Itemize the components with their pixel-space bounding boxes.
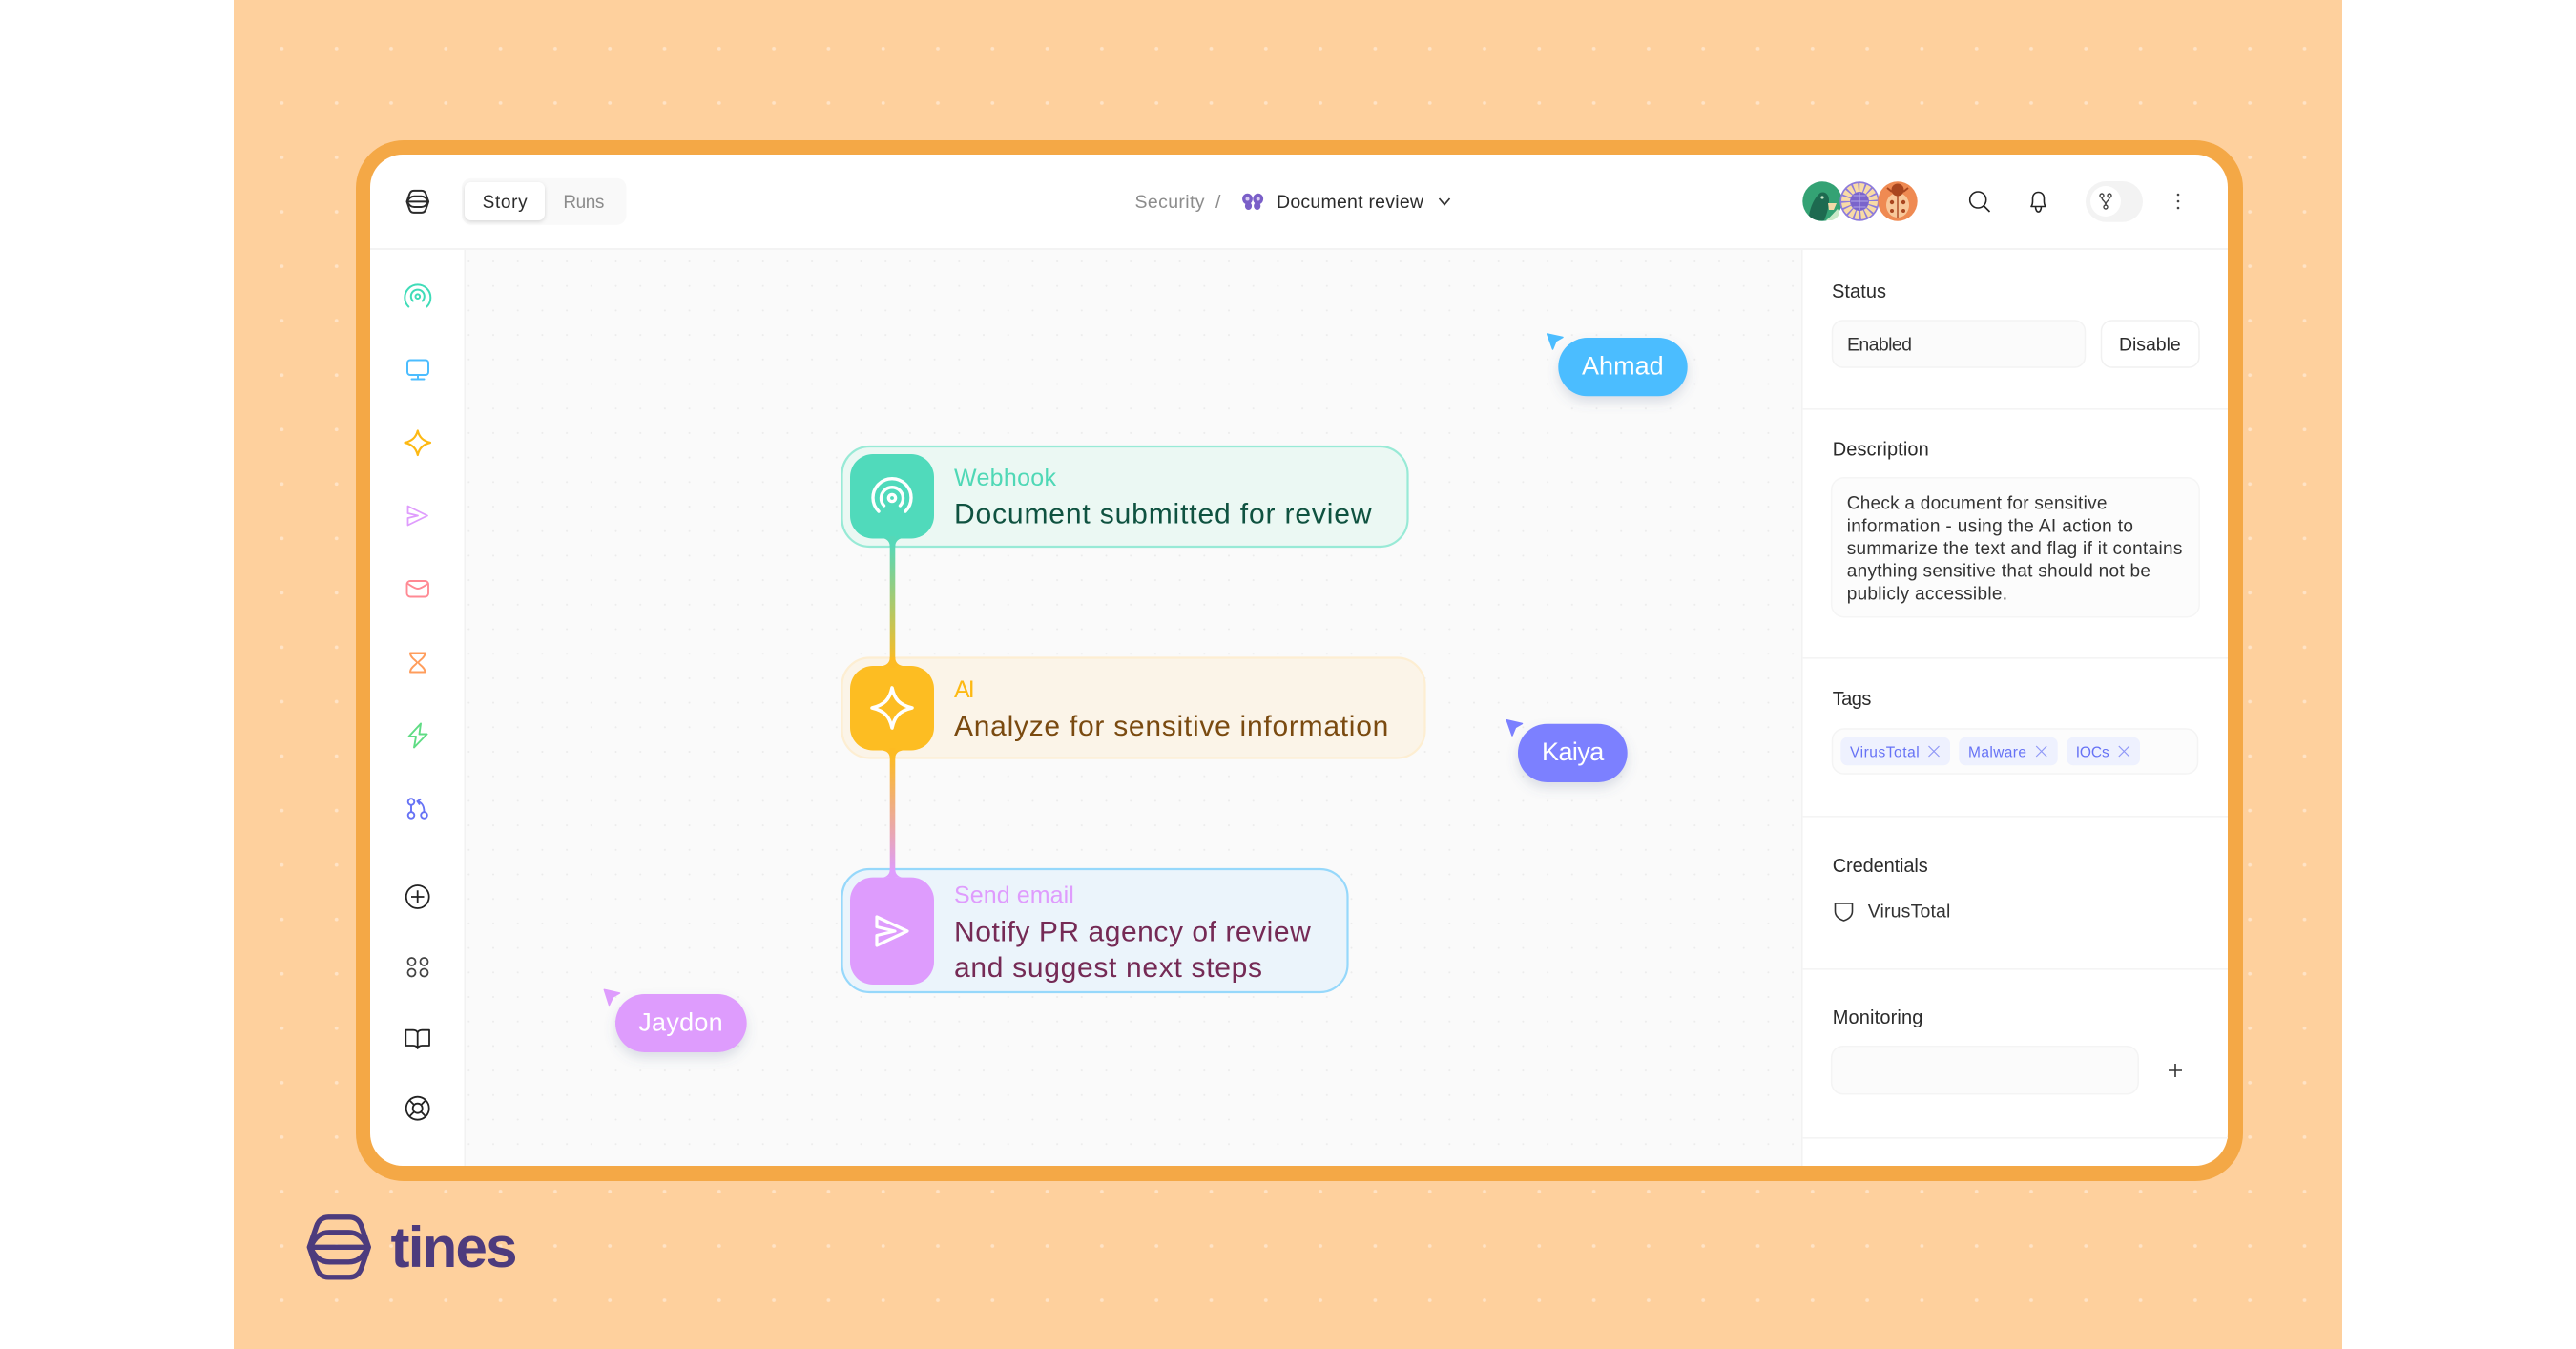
icon: add (406, 885, 429, 908)
icon: sparkle (405, 431, 430, 455)
section: status: Disable (2119, 334, 2181, 355)
icon: chevron (1439, 198, 1450, 204)
top bar (370, 178, 2228, 250)
cursor: Ahmad: Ahmad (1582, 351, 1664, 380)
logo: tines (309, 1215, 517, 1279)
node: webhook: Webhook (954, 465, 1057, 491)
icon: branch (408, 799, 427, 819)
section: description: Description (1833, 440, 1929, 461)
avatar: orange ladybug (1878, 181, 1918, 221)
avatar: green bird (1802, 181, 1842, 221)
icon: tines mark (309, 1217, 368, 1277)
tabs: Story and Runs (462, 178, 626, 225)
logo: tines: tines (391, 1215, 517, 1279)
section: monitoring (1832, 1007, 2182, 1094)
node: AI: AI (954, 676, 975, 703)
node: webhook: Document submitted for review (954, 498, 1372, 530)
section: status (1832, 281, 2199, 367)
node: send email: Send email (954, 882, 1074, 908)
cursor: Jaydon: Jaydon (638, 1008, 723, 1037)
section: tags: Tags (1833, 689, 1871, 710)
avatar: sunflower globe (1839, 181, 1880, 221)
connector: AI to send email (883, 748, 903, 880)
tag: Malware (1959, 737, 2058, 765)
section: monitoring: Monitoring (1833, 1007, 1922, 1028)
icon: hourglass (410, 653, 426, 672)
icon: shield (1836, 903, 1853, 921)
node: send email: Notify PR agency of review (954, 916, 1311, 948)
toggle with branch icon (2086, 181, 2143, 222)
cursor: Ahmad (1548, 334, 1688, 396)
section: tags (1832, 689, 2198, 774)
icon: bolt (408, 723, 427, 748)
icon: tines mark (407, 191, 428, 213)
icon: apps (408, 958, 427, 977)
cursor: Jaydon (604, 989, 747, 1052)
node: webhook (841, 446, 1408, 547)
section: description: information - using the AI action to (1847, 516, 2133, 536)
app window frame (356, 140, 2243, 1181)
section: credentials (1833, 856, 1950, 923)
section: status: Status (1832, 281, 1886, 302)
cursor: Kaiya (1506, 720, 1628, 782)
node: AI: Analyze for sensitive information (954, 711, 1388, 742)
icon: help (406, 1097, 429, 1120)
node: send email (841, 869, 1347, 992)
section: description (1832, 440, 2199, 617)
icon: butterfly (1242, 194, 1263, 210)
connector: webhook to AI (883, 536, 903, 668)
sidebar icons (405, 284, 430, 1120)
tabs: Story and Runs: Runs (563, 193, 604, 213)
icon: search (1970, 192, 1990, 212)
section: credentials: VirusTotal (1868, 902, 1950, 923)
icon: book (405, 1030, 429, 1048)
breadcrumb (1135, 192, 1450, 213)
breadcrumb: / (1215, 192, 1221, 213)
tag: VirusTotal (1840, 737, 1950, 765)
tabs: Story and Runs: Story (483, 193, 528, 213)
icon tile: send (850, 878, 934, 985)
panel: properties (1802, 281, 2228, 1139)
section: description: publicly accessible. (1847, 584, 2007, 604)
breadcrumb: Security (1135, 192, 1205, 213)
section: status: Enabled (1847, 334, 1912, 355)
icon: monitor (407, 361, 428, 380)
canvas with dotted grid (464, 250, 1803, 1166)
tag: VirusTotal: VirusTotal (1850, 744, 1920, 760)
tag: IOCs (2067, 737, 2140, 765)
section: description: summarize the text and flag if it contains (1847, 539, 2182, 559)
node: AI (841, 658, 1425, 758)
tag: IOCs: IOCs (2076, 744, 2109, 760)
icon: send (408, 506, 427, 525)
section: description: Check a document for sensitive (1847, 493, 2107, 513)
icon tile: AI sparkle (850, 666, 934, 750)
icon: more menu (2177, 194, 2179, 209)
section: description: anything sensitive that should not be (1847, 562, 2150, 582)
section: credentials: Credentials (1833, 856, 1928, 877)
node: send email: and suggest next steps (954, 952, 1262, 984)
icon: plus (2169, 1064, 2182, 1077)
icon: envelope (406, 581, 428, 597)
tag: Malware: Malware (1968, 744, 2026, 760)
cursor: Kaiya: Kaiya (1542, 737, 1605, 766)
breadcrumb: Document review (1277, 192, 1424, 213)
avatars (1802, 181, 1918, 221)
icon: bell (2031, 193, 2046, 212)
icon: webhook (405, 284, 430, 307)
icon tile: webhook (850, 454, 934, 538)
